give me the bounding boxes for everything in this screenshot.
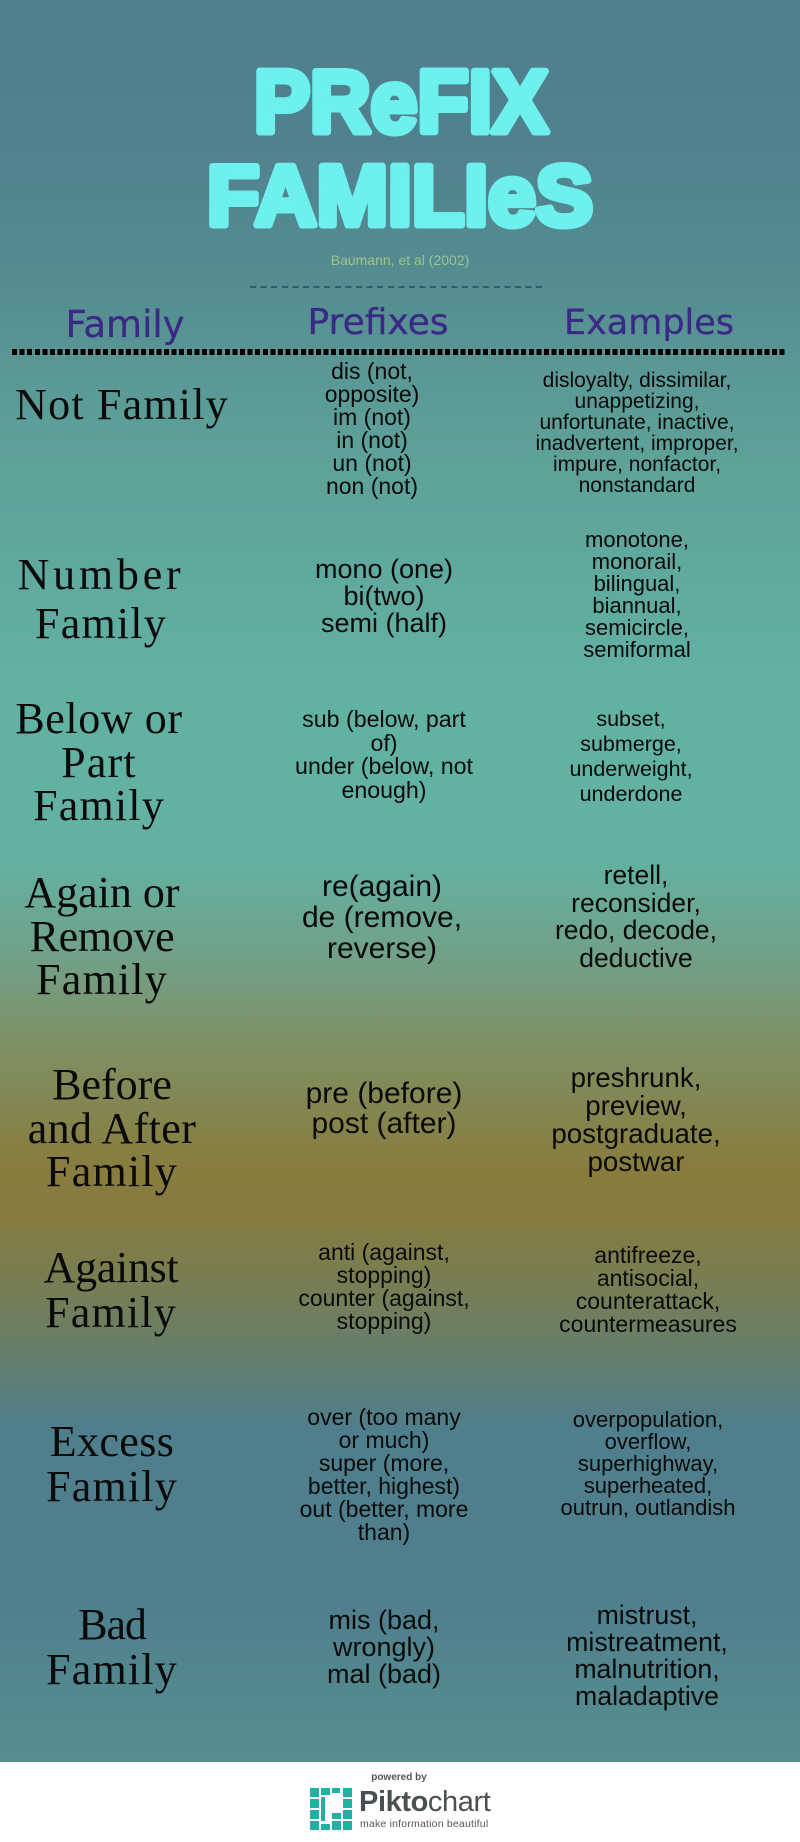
- examples: Bad Family: malnutrition,: [574, 1654, 720, 1684]
- tagline: make information beautiful: [360, 1818, 488, 1830]
- examples: Against Family: antifreeze,: [594, 1242, 702, 1268]
- prefixes: Before and After Family: [306, 1077, 462, 1140]
- prefixes: Against Family: [298, 1238, 470, 1334]
- prefixes: Not Family: in (not): [336, 426, 408, 452]
- examples: Below or Part Family: [569, 706, 693, 806]
- row: Before and After Family: and After: [28, 1104, 196, 1152]
- prefixes: Against Family: counter (against,: [298, 1284, 470, 1310]
- title: [207, 52, 594, 240]
- examples: Excess Family: overflow,: [605, 1429, 691, 1454]
- prefixes: Below or Part Family: [295, 706, 473, 803]
- prefixes: Again or Remove Family: de (remove,: [302, 900, 462, 934]
- examples: Bad Family: [566, 1600, 728, 1710]
- dashed divider: [250, 286, 546, 288]
- examples: Below or Part Family: submerge,: [580, 732, 682, 756]
- row: Below or Part Family: Below or: [15, 694, 183, 743]
- prefixes: Number Family: [315, 554, 453, 638]
- row: Below or Part Family: Family: [33, 781, 165, 830]
- examples: Before and After Family: postwar: [588, 1146, 684, 1177]
- row: Below or Part Family: Part: [61, 738, 137, 786]
- prefixes: Not Family: un (not): [332, 450, 412, 476]
- prefixes: Against Family: anti (against,: [318, 1238, 450, 1264]
- examples: Again or Remove Family: [555, 860, 717, 972]
- prefixes: Bad Family: wrongly): [333, 1632, 435, 1662]
- examples: Against Family: antisocial,: [597, 1264, 699, 1290]
- row: Bad Family: [46, 1600, 178, 1694]
- row: Against Family: Against: [44, 1243, 178, 1292]
- row: Again or Remove Family: Again or: [24, 868, 180, 917]
- prefixes: Excess Family: over (too many: [307, 1404, 461, 1430]
- examples: Not Family: inadvertent, improper,: [535, 432, 739, 454]
- prefixes: Number Family: semi (half): [321, 608, 447, 638]
- examples: Not Family: [535, 368, 739, 496]
- row: Before and After Family: Before: [52, 1060, 172, 1109]
- row: Against Family: Family: [45, 1288, 177, 1337]
- examples: Before and After Family: postgraduate,: [551, 1118, 721, 1149]
- examples: Below or Part Family: underdone: [580, 782, 682, 806]
- prefixes: Number Family: bi(two): [343, 580, 425, 610]
- row: Before and After Family: [28, 1060, 196, 1196]
- prefixes: Again or Remove Family: reverse): [327, 932, 437, 964]
- examples: Bad Family: mistrust,: [597, 1600, 697, 1630]
- examples: Excess Family: outrun, outlandish: [561, 1495, 735, 1520]
- examples: Against Family: countermeasures: [559, 1310, 737, 1336]
- row: Below or Part Family: [15, 694, 183, 830]
- examples: Number Family: semiformal: [583, 637, 691, 662]
- examples: Against Family: [559, 1242, 737, 1336]
- examples: Number Family: semicircle,: [585, 615, 689, 640]
- examples: Again or Remove Family: deductive: [579, 942, 693, 972]
- prefixes: Below or Part Family: sub (below, part: [302, 706, 466, 732]
- powered by: powered by: [371, 1772, 427, 1783]
- prefixes: Not Family: dis (not,: [331, 358, 413, 384]
- prefixes: Before and After Family: post (after): [311, 1107, 457, 1140]
- examples: Again or Remove Family: redo, decode,: [555, 915, 717, 945]
- row: Again or Remove Family: Family: [36, 955, 168, 1004]
- prefixes: Against Family: stopping): [337, 1308, 431, 1334]
- prefixes: Not Family: opposite): [325, 380, 419, 406]
- prefixes: Excess Family: super (more,: [319, 1450, 449, 1476]
- row: Bad Family: Family: [46, 1645, 178, 1694]
- footer: Piktochart branding: [0, 1762, 800, 1842]
- examples: Bad Family: maladaptive: [575, 1680, 719, 1710]
- examples: Not Family: unappetizing,: [575, 390, 699, 412]
- examples: Number Family: monorail,: [592, 549, 682, 574]
- row: Not Family: Not Family: [15, 380, 229, 429]
- row: Excess Family: [46, 1417, 178, 1511]
- prefixes: Before and After Family: pre (before): [306, 1077, 462, 1110]
- table header: Prefixes: Prefixes: [307, 302, 449, 343]
- examples: Number Family: biannual,: [592, 593, 682, 618]
- prefixes: Below or Part Family: under (below, not: [295, 753, 473, 779]
- prefixes: Below or Part Family: enough): [341, 776, 427, 802]
- prefixes: Not Family: im (not): [333, 404, 411, 430]
- row: Number Family: Family: [35, 599, 167, 648]
- row: Number Family: Number: [18, 550, 184, 599]
- row: Bad Family: Bad: [78, 1600, 146, 1649]
- examples: Excess Family: overpopulation,: [573, 1407, 723, 1432]
- prefixes: Excess Family: [300, 1404, 468, 1545]
- row: Against Family: [44, 1243, 178, 1337]
- prefixes: Below or Part Family: of): [370, 730, 398, 756]
- table header: Family: Family: [65, 303, 185, 346]
- prefixes: Again or Remove Family: re(again): [322, 870, 442, 902]
- examples: Again or Remove Family: retell,: [604, 860, 668, 890]
- examples: Excess Family: [561, 1407, 735, 1520]
- prefixes: Excess Family: out (better, more: [300, 1496, 468, 1522]
- prefixes: Number Family: mono (one): [315, 554, 453, 584]
- prefixes: Bad Family: mal (bad): [327, 1658, 441, 1688]
- examples: Below or Part Family: subset,: [596, 706, 666, 730]
- prefixes: Bad Family: mis (bad,: [328, 1604, 440, 1634]
- dotted divider: [12, 349, 786, 355]
- examples: Number Family: bilingual,: [594, 571, 680, 596]
- examples: Again or Remove Family: reconsider,: [571, 888, 701, 918]
- row: Number Family: [18, 550, 184, 648]
- prefixes: Excess Family: better, highest): [308, 1472, 460, 1498]
- examples: Not Family: unfortunate, inactive,: [540, 410, 734, 434]
- prefixes: Against Family: stopping): [337, 1262, 431, 1288]
- prefixes: Not Family: [325, 358, 419, 499]
- table header: Examples: Examples: [564, 303, 734, 343]
- prefixes: Again or Remove Family: [302, 870, 462, 964]
- examples: Excess Family: superhighway,: [578, 1451, 718, 1476]
- prefixes: Bad Family: [327, 1604, 441, 1688]
- examples: Bad Family: mistreatment,: [566, 1626, 728, 1656]
- row: Excess Family: Excess: [50, 1417, 174, 1466]
- examples: Against Family: counterattack,: [576, 1288, 720, 1314]
- row: Again or Remove Family: [24, 868, 180, 1004]
- row: Again or Remove Family: Remove: [30, 912, 174, 960]
- examples: Number Family: [583, 527, 691, 662]
- prefixes: Not Family: non (not): [326, 472, 418, 498]
- examples: Below or Part Family: underweight,: [569, 756, 693, 780]
- row: Excess Family: Family: [46, 1462, 178, 1511]
- prefixes: Excess Family: or much): [339, 1426, 429, 1452]
- wordmark: Piktochart: [359, 1786, 490, 1818]
- icon: Piktochart logo: [310, 1788, 352, 1830]
- examples: Before and After Family: preview,: [585, 1090, 687, 1121]
- examples: Not Family: nonstandard: [579, 474, 695, 496]
- row: Before and After Family: Family: [46, 1147, 178, 1196]
- title: PReFIX: [254, 52, 548, 151]
- examples: Number Family: monotone,: [585, 527, 689, 552]
- citation: Baumann, et al (2002): [331, 252, 469, 268]
- examples: Before and After Family: preshrunk,: [571, 1062, 701, 1093]
- examples: Before and After Family: [551, 1062, 721, 1177]
- examples: Not Family: disloyalty, dissimilar,: [543, 368, 731, 392]
- examples: Not Family: impure, nonfactor,: [553, 452, 721, 476]
- examples: Excess Family: superheated,: [584, 1473, 712, 1498]
- prefixes: Excess Family: than): [358, 1518, 410, 1544]
